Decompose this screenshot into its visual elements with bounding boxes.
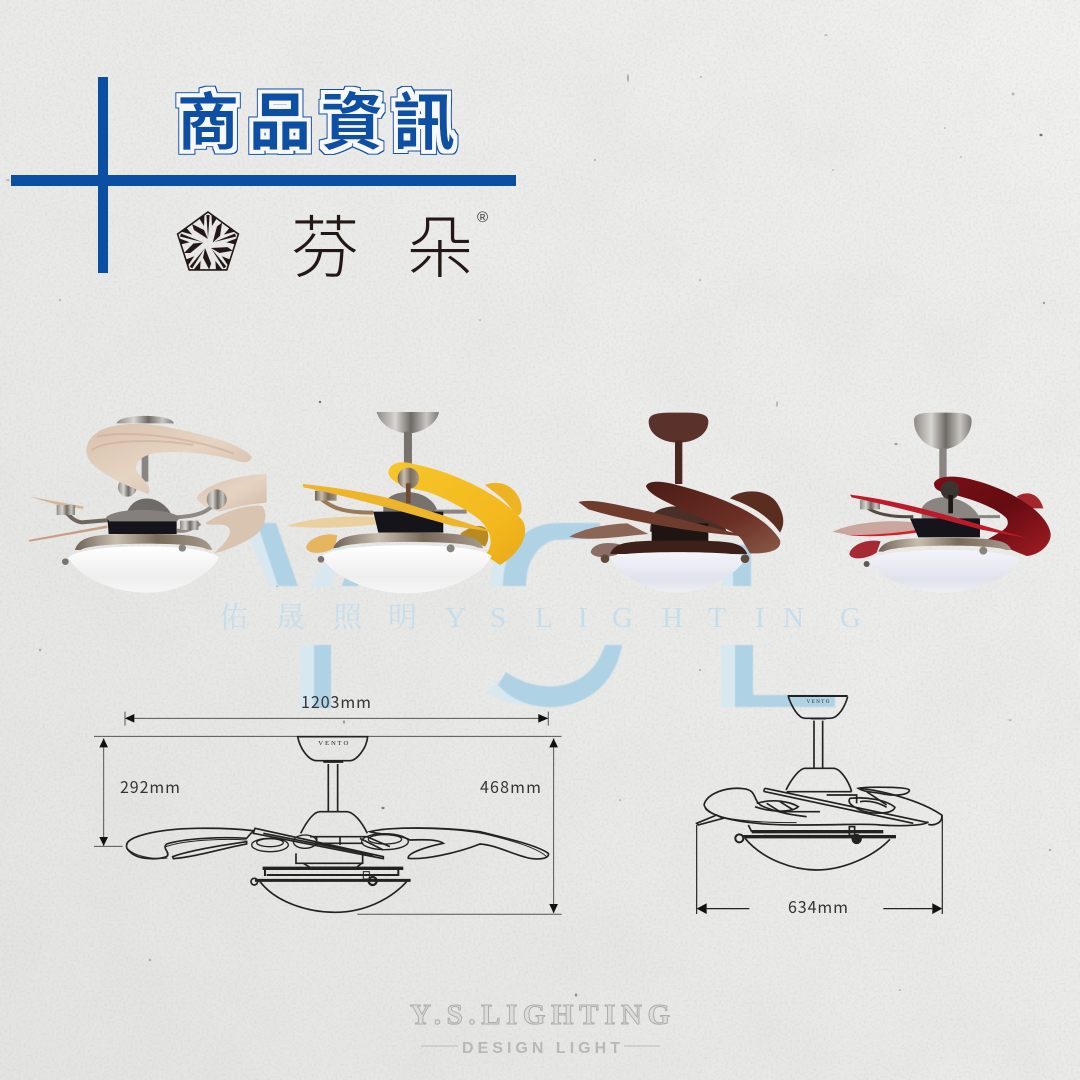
footer brand: Y.S.LIGHTING [410, 999, 670, 1031]
dimension: 292mm height arrow [94, 738, 123, 846]
header rule: horizontal [11, 175, 516, 186]
footer tagline: DESIGN LIGHT [462, 1040, 620, 1057]
icon: brand pentagon logo [175, 212, 238, 277]
fan: yellow [287, 412, 525, 593]
header rule: vertical [98, 77, 108, 273]
label: VENTO: VENTO [807, 700, 830, 705]
label: 1203mm: 1203mm [301, 689, 371, 713]
fan: light wood [28, 416, 267, 593]
label: 292mm: 292mm [120, 774, 180, 798]
title: 商品資訊 [177, 89, 465, 158]
brand name: 芬朵 [291, 211, 474, 287]
diagram: front view with dimensions [94, 712, 562, 914]
label: VENTO: VENTO [318, 740, 348, 747]
fan: dark walnut [569, 413, 783, 593]
watermark: brand text: 佑晟照明YSLIGHTING [219, 601, 861, 634]
label: 634mm: 634mm [788, 894, 848, 918]
label: 468mm: 468mm [480, 774, 541, 798]
fan line art [127, 737, 548, 912]
diagram: folded view with dimension [697, 696, 942, 914]
fan line art [697, 696, 942, 870]
registered mark: ® [477, 209, 488, 226]
dimension: 468mm height arrow [357, 738, 562, 914]
dimension: 1203mm width arrow [94, 712, 562, 736]
fan: crimson [833, 413, 1051, 593]
watermark: large blue letters [243, 523, 835, 708]
dimension: 634mm width arrows [697, 815, 942, 914]
